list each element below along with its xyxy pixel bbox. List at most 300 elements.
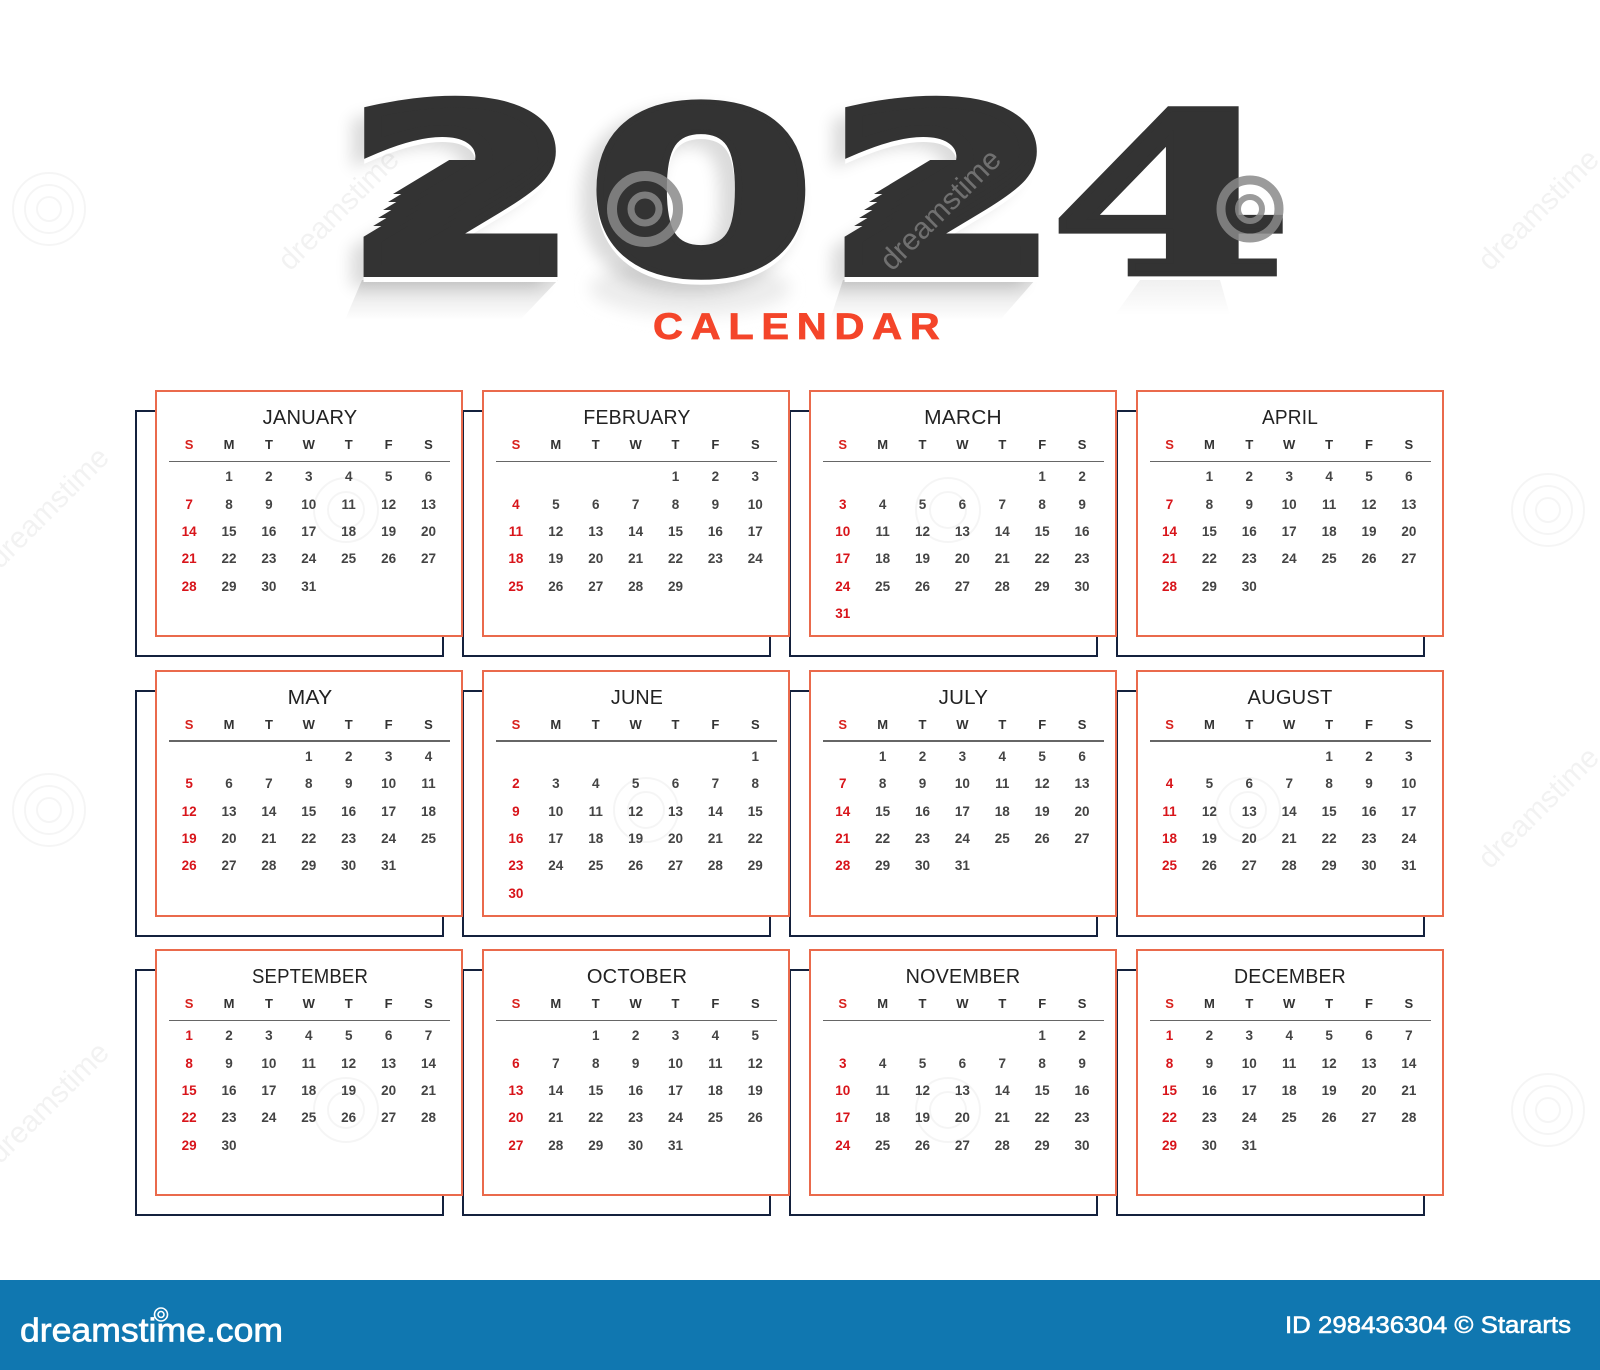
day grid: 5 bbox=[1325, 1028, 1333, 1043]
day grid: 12 bbox=[182, 804, 197, 819]
thickened diagonals of the two digits 2: 2 bbox=[346, 35, 578, 300]
day grid: 16 bbox=[915, 804, 930, 819]
day grid: 10 bbox=[1401, 776, 1416, 791]
day grid: 15 bbox=[588, 1083, 603, 1098]
digits 2024: 0 bbox=[584, 59, 818, 329]
weekday header: S bbox=[1405, 996, 1413, 1011]
day grid: 12 bbox=[341, 1056, 356, 1071]
weekday header: T bbox=[345, 717, 353, 732]
weekday header bbox=[512, 996, 760, 1011]
weekday header: S bbox=[1165, 437, 1174, 452]
weekday header: W bbox=[1283, 437, 1295, 452]
weekday header: W bbox=[629, 437, 642, 452]
weekday header: T bbox=[672, 996, 679, 1011]
day grid: 19 bbox=[628, 831, 643, 846]
panel: March bbox=[789, 390, 1117, 657]
day grid: 8 bbox=[225, 497, 233, 512]
weekday header: W bbox=[956, 437, 969, 452]
day grid: 3 bbox=[305, 469, 313, 484]
day grid: 5 bbox=[752, 1028, 759, 1043]
day grid: 8 bbox=[1206, 497, 1213, 512]
month name: JUNE bbox=[611, 686, 663, 709]
day grid: 30 bbox=[508, 886, 523, 901]
day grid: 7 bbox=[1285, 776, 1293, 791]
day grid: 18 bbox=[1162, 831, 1177, 846]
weekday header: S bbox=[1165, 996, 1174, 1011]
day grid: 7 bbox=[425, 1028, 432, 1043]
day grid: 5 bbox=[385, 469, 392, 484]
day grid: 9 bbox=[1078, 497, 1086, 512]
panel: January bbox=[135, 390, 463, 657]
day grid: 1 bbox=[672, 469, 679, 484]
weekday header: F bbox=[385, 437, 393, 452]
day grid: 3 bbox=[839, 1056, 846, 1071]
month name: MARCH bbox=[925, 406, 1002, 429]
day grid: 24 bbox=[668, 1110, 683, 1125]
day grid: 1 bbox=[225, 469, 233, 484]
weekday header: M bbox=[1204, 996, 1215, 1011]
day grid: 27 bbox=[1075, 831, 1090, 846]
weekday header: S bbox=[838, 996, 847, 1011]
day grid: 3 bbox=[839, 497, 846, 512]
day grid: 4 bbox=[345, 469, 352, 484]
month name: SEPTEMBER bbox=[252, 965, 368, 988]
thickened diagonals of the two digits 2: 2 bbox=[346, 40, 578, 305]
day grid: 28 bbox=[995, 579, 1010, 594]
day grid: 11 bbox=[302, 1056, 316, 1071]
day grid: 5 bbox=[185, 776, 193, 791]
day grid: 4 bbox=[425, 749, 432, 764]
day grid: 19 bbox=[341, 1083, 356, 1098]
day grid: 5 bbox=[552, 497, 560, 512]
day grid: 22 bbox=[875, 831, 890, 846]
day grid: 28 bbox=[421, 1110, 436, 1125]
day grid: 20 bbox=[955, 1110, 970, 1125]
day grid: 15 bbox=[222, 524, 237, 539]
day grid: 11 bbox=[1162, 804, 1177, 819]
day grid: 25 bbox=[588, 858, 603, 873]
day grid: 2 bbox=[632, 1028, 639, 1043]
day grid: 10 bbox=[261, 1056, 276, 1071]
month name: FEBRUARY bbox=[583, 406, 690, 429]
weekday header: S bbox=[424, 717, 433, 732]
weekday header: W bbox=[956, 717, 969, 732]
day grid: 13 bbox=[588, 524, 603, 539]
day grid: 27 bbox=[955, 579, 970, 594]
weekday header: T bbox=[1325, 717, 1333, 732]
weekday header: F bbox=[1365, 717, 1373, 732]
day grid: 2 bbox=[265, 469, 273, 484]
day grid: 28 bbox=[548, 1138, 563, 1153]
day grid: 12 bbox=[628, 804, 643, 819]
day grid: 21 bbox=[995, 551, 1010, 566]
day grid: 14 bbox=[182, 524, 197, 539]
day grid: 30 bbox=[1361, 858, 1376, 873]
day grid: 7 bbox=[1166, 497, 1173, 512]
day grid: 29 bbox=[748, 858, 763, 873]
day grid: 12 bbox=[748, 1056, 763, 1071]
panel: May bbox=[135, 670, 463, 937]
day grid bbox=[1162, 1028, 1416, 1153]
day grid: 19 bbox=[915, 1110, 930, 1125]
day grid: 17 bbox=[261, 1083, 276, 1098]
day grid: 15 bbox=[301, 804, 316, 819]
day grid: 9 bbox=[225, 1056, 233, 1071]
weekday header: M bbox=[877, 996, 888, 1011]
day grid: 4 bbox=[1285, 1028, 1293, 1043]
day grid: 6 bbox=[512, 1056, 520, 1071]
day grid: 5 bbox=[1206, 776, 1213, 791]
weekday header: S bbox=[512, 437, 520, 452]
day grid: 25 bbox=[708, 1110, 723, 1125]
day grid: 12 bbox=[915, 1083, 930, 1098]
day grid: 22 bbox=[1162, 1110, 1177, 1125]
day grid: 10 bbox=[301, 497, 316, 512]
day grid: 17 bbox=[548, 831, 563, 846]
panel: September bbox=[135, 949, 463, 1216]
day grid: 26 bbox=[381, 551, 396, 566]
thickened diagonals of the two digits 2: 2 bbox=[827, 35, 1059, 300]
day grid: 20 bbox=[955, 551, 970, 566]
weekday header: S bbox=[512, 717, 520, 732]
day grid: 8 bbox=[305, 776, 313, 791]
weekday header: M bbox=[550, 996, 561, 1011]
day grid: 1 bbox=[1325, 749, 1333, 764]
zero highlight: 0 bbox=[584, 64, 818, 334]
thickened diagonals of the two digits 2: 2 bbox=[827, 50, 1059, 315]
weekday header: S bbox=[751, 717, 760, 732]
weekday header: T bbox=[265, 996, 273, 1011]
weekday header: T bbox=[345, 437, 353, 452]
weekday header: W bbox=[303, 996, 315, 1011]
day grid: 10 bbox=[1282, 497, 1297, 512]
weekday header: S bbox=[1078, 717, 1086, 732]
day grid: 23 bbox=[1202, 1110, 1217, 1125]
faint watermark text on background bbox=[0, 143, 1600, 1170]
weekday header: S bbox=[185, 996, 193, 1011]
digit shadows: 0 bbox=[572, 69, 806, 339]
day grid: 23 bbox=[222, 1110, 237, 1125]
weekday header bbox=[185, 437, 433, 452]
day grid: 1 bbox=[1206, 469, 1213, 484]
day grid: 16 bbox=[261, 524, 276, 539]
day grid: 8 bbox=[752, 776, 759, 791]
day grid: 15 bbox=[1162, 1083, 1177, 1098]
day grid: 23 bbox=[508, 858, 523, 873]
weekday header bbox=[838, 717, 1086, 732]
day grid: 3 bbox=[552, 776, 560, 791]
weekday header: S bbox=[751, 437, 760, 452]
day grid: 28 bbox=[708, 858, 723, 873]
day grid: 11 bbox=[1322, 497, 1336, 512]
day grid: 2 bbox=[919, 749, 926, 764]
day grid: 20 bbox=[421, 524, 436, 539]
day grid: 1 bbox=[752, 749, 759, 764]
weekday header: T bbox=[592, 996, 600, 1011]
digit shadows bbox=[332, 69, 1045, 339]
weekday header: M bbox=[224, 996, 234, 1011]
day grid: 20 bbox=[1075, 804, 1090, 819]
day grid: 9 bbox=[1365, 776, 1373, 791]
day grid: 1 bbox=[592, 1028, 599, 1043]
day grid: 6 bbox=[385, 1028, 392, 1043]
thickened diagonals of the two digits 2: 2 bbox=[827, 40, 1059, 305]
day grid: 8 bbox=[1038, 1056, 1046, 1071]
weekday header: F bbox=[1365, 996, 1373, 1011]
day grid bbox=[182, 469, 436, 594]
month name: JANUARY bbox=[262, 406, 357, 429]
day grid: 26 bbox=[748, 1110, 763, 1125]
weekday header: T bbox=[1245, 437, 1253, 452]
day grid: 29 bbox=[301, 858, 316, 873]
day grid: 6 bbox=[1246, 776, 1253, 791]
day grid: 23 bbox=[915, 831, 930, 846]
day grid: 9 bbox=[512, 804, 520, 819]
day grid: 27 bbox=[668, 858, 683, 873]
panel: August bbox=[1116, 670, 1444, 937]
weekday header: W bbox=[1283, 996, 1295, 1011]
day grid: 12 bbox=[1322, 1056, 1337, 1071]
day grid: 26 bbox=[628, 858, 643, 873]
day grid: 16 bbox=[1361, 804, 1376, 819]
day grid: 31 bbox=[1242, 1138, 1257, 1153]
weekday header: T bbox=[265, 437, 273, 452]
thickened diagonals of the two digits 2: 2 bbox=[346, 45, 578, 310]
day grid: 3 bbox=[1285, 469, 1293, 484]
day grid: 30 bbox=[1202, 1138, 1217, 1153]
weekday header bbox=[512, 437, 760, 452]
weekday header: W bbox=[956, 996, 969, 1011]
day grid: 20 bbox=[1401, 524, 1416, 539]
day grid: 18 bbox=[508, 551, 523, 566]
weekday header: W bbox=[629, 717, 642, 732]
day grid: 4 bbox=[1166, 776, 1173, 791]
day grid: 6 bbox=[425, 469, 432, 484]
thickened diagonals of the two digits 2: 2 bbox=[827, 55, 1059, 320]
day grid: 11 bbox=[421, 776, 436, 791]
day grid: 25 bbox=[301, 1110, 316, 1125]
day grid: 14 bbox=[261, 804, 276, 819]
calendar subtitle: CALENDAR bbox=[653, 306, 940, 347]
day grid: 29 bbox=[1035, 1138, 1050, 1153]
day grid: 18 bbox=[1282, 1083, 1297, 1098]
day grid: 24 bbox=[381, 831, 396, 846]
day grid bbox=[835, 749, 1090, 873]
day grid: 17 bbox=[1242, 1083, 1257, 1098]
day grid: 6 bbox=[1078, 749, 1086, 764]
weekday header: W bbox=[303, 437, 315, 452]
thickened diagonals of the two digits 2: 2 bbox=[346, 55, 578, 320]
day grid: 9 bbox=[1206, 1056, 1213, 1071]
day grid: 2 bbox=[512, 776, 520, 791]
day grid: 26 bbox=[548, 579, 563, 594]
day grid: 4 bbox=[592, 776, 599, 791]
day grid: 21 bbox=[1282, 831, 1297, 846]
day grid: 7 bbox=[1405, 1028, 1413, 1043]
day grid: 8 bbox=[592, 1056, 599, 1071]
weekday header bbox=[185, 717, 433, 732]
day grid bbox=[508, 1028, 763, 1153]
day grid: 21 bbox=[421, 1083, 436, 1098]
thickened diagonals of the two digits 2 bbox=[373, 160, 956, 226]
day grid: 13 bbox=[421, 497, 436, 512]
weekday header: S bbox=[1405, 717, 1413, 732]
digit highlights: 2 bbox=[827, 65, 1059, 330]
day grid: 19 bbox=[1322, 1083, 1337, 1098]
day grid: 24 bbox=[301, 551, 316, 566]
weekday header: S bbox=[838, 437, 847, 452]
day grid: 13 bbox=[508, 1083, 523, 1098]
day grid: 9 bbox=[265, 497, 273, 512]
day grid: 14 bbox=[1401, 1056, 1416, 1071]
day grid: 24 bbox=[1242, 1110, 1257, 1125]
month name: OCTOBER bbox=[586, 965, 687, 988]
day grid: 2 bbox=[225, 1028, 233, 1043]
day grid: 14 bbox=[421, 1056, 436, 1071]
weekday header: S bbox=[838, 717, 847, 732]
day grid bbox=[182, 1028, 436, 1153]
day grid: 23 bbox=[1075, 551, 1090, 566]
day grid: 13 bbox=[1242, 804, 1257, 819]
day grid: 24 bbox=[1282, 551, 1297, 566]
day grid: 31 bbox=[668, 1138, 683, 1153]
day grid: 3 bbox=[959, 749, 966, 764]
day grid: 27 bbox=[421, 551, 436, 566]
day grid: 20 bbox=[588, 551, 603, 566]
digit shadows: 2 bbox=[813, 71, 1045, 336]
day grid: 14 bbox=[1162, 524, 1177, 539]
day grid: 18 bbox=[875, 1110, 890, 1125]
day grid: 27 bbox=[381, 1110, 396, 1125]
day grid: 6 bbox=[1365, 1028, 1373, 1043]
day grid: 28 bbox=[182, 579, 197, 594]
day grid bbox=[1162, 749, 1416, 873]
day grid: 25 bbox=[508, 579, 523, 594]
day grid: 27 bbox=[588, 579, 603, 594]
day grid: 20 bbox=[1242, 831, 1257, 846]
day grid bbox=[835, 1028, 1090, 1153]
weekday header bbox=[1165, 996, 1413, 1011]
title: 2024 calendar heading bbox=[332, 59, 1293, 347]
day grid: 26 bbox=[1361, 551, 1376, 566]
day grid: 27 bbox=[222, 858, 237, 873]
day grid: 1 bbox=[879, 749, 886, 764]
day grid: 31 bbox=[955, 858, 970, 873]
weekday header: T bbox=[592, 717, 600, 732]
day grid: 30 bbox=[1075, 1138, 1090, 1153]
weekday header: T bbox=[1245, 717, 1253, 732]
day grid: 15 bbox=[1035, 524, 1050, 539]
day grid: 21 bbox=[628, 551, 643, 566]
day grid: 14 bbox=[835, 804, 850, 819]
day grid: 5 bbox=[632, 776, 639, 791]
day grid: 20 bbox=[668, 831, 683, 846]
day grid: 29 bbox=[1162, 1138, 1177, 1153]
day grid: 19 bbox=[381, 524, 396, 539]
weekday header: S bbox=[1078, 437, 1086, 452]
day grid: 15 bbox=[1202, 524, 1217, 539]
month name: MAY bbox=[287, 686, 332, 709]
day grid: 1 bbox=[1038, 469, 1046, 484]
day grid: 11 bbox=[708, 1056, 723, 1071]
weekday header: W bbox=[1283, 717, 1295, 732]
day grid: 14 bbox=[995, 524, 1010, 539]
day grid: 11 bbox=[509, 524, 523, 539]
day grid: 11 bbox=[995, 776, 1009, 791]
day grid: 25 bbox=[1282, 1110, 1297, 1125]
day grid: 26 bbox=[1202, 858, 1217, 873]
day grid: 16 bbox=[341, 804, 356, 819]
day grid: 7 bbox=[632, 497, 639, 512]
day grid: 14 bbox=[1282, 804, 1297, 819]
day grid: 16 bbox=[708, 524, 723, 539]
day grid: 12 bbox=[548, 524, 563, 539]
day grid: 6 bbox=[959, 1056, 966, 1071]
weekday header: S bbox=[512, 996, 520, 1011]
day grid: 29 bbox=[875, 858, 890, 873]
faint watermark spirals on background bbox=[13, 173, 1584, 1146]
image id and credit: ID 298436304 © Stararts bbox=[1285, 1312, 1571, 1339]
digits 2024: 2 bbox=[346, 60, 578, 325]
day grid: 15 bbox=[748, 804, 763, 819]
day grid: 22 bbox=[1202, 551, 1217, 566]
day grid: 18 bbox=[708, 1083, 723, 1098]
day grid: 19 bbox=[748, 1083, 763, 1098]
panel: June bbox=[462, 670, 790, 937]
day grid: 23 bbox=[1242, 551, 1257, 566]
day grid: 18 bbox=[995, 804, 1010, 819]
day grid: 10 bbox=[835, 524, 850, 539]
day grid: 22 bbox=[222, 551, 237, 566]
day grid: 13 bbox=[1361, 1056, 1376, 1071]
weekday header: M bbox=[224, 437, 234, 452]
weekday header: M bbox=[1204, 437, 1215, 452]
day grid: 15 bbox=[875, 804, 890, 819]
day grid: 24 bbox=[835, 1138, 850, 1153]
day grid: 13 bbox=[1075, 776, 1090, 791]
weekday header: T bbox=[919, 996, 926, 1011]
day grid: 28 bbox=[628, 579, 643, 594]
panel: October bbox=[462, 949, 790, 1216]
weekday header: S bbox=[1165, 717, 1174, 732]
day grid: 4 bbox=[305, 1028, 313, 1043]
day grid: 2 bbox=[712, 469, 719, 484]
day grid: 24 bbox=[835, 579, 850, 594]
day grid: 8 bbox=[1325, 776, 1333, 791]
day grid: 3 bbox=[1246, 1028, 1253, 1043]
weekday header: T bbox=[265, 717, 273, 732]
weekday header: F bbox=[711, 717, 719, 732]
day grid: 4 bbox=[879, 1056, 886, 1071]
day grid: 12 bbox=[381, 497, 396, 512]
month name: APRIL bbox=[1262, 406, 1318, 429]
day grid: 12 bbox=[1202, 804, 1217, 819]
weekday header: S bbox=[185, 717, 193, 732]
day grid: 12 bbox=[1035, 776, 1050, 791]
day grid: 8 bbox=[185, 1056, 193, 1071]
day grid: 30 bbox=[1242, 579, 1257, 594]
day grid: 28 bbox=[1401, 1110, 1416, 1125]
day grid: 29 bbox=[588, 1138, 603, 1153]
day grid: 2 bbox=[1365, 749, 1373, 764]
day grid: 18 bbox=[1322, 524, 1337, 539]
day grid: 15 bbox=[182, 1083, 197, 1098]
panel: July bbox=[789, 670, 1117, 937]
day grid: 11 bbox=[589, 804, 603, 819]
day grid: 28 bbox=[261, 858, 276, 873]
day grid: 31 bbox=[301, 579, 316, 594]
day grid bbox=[182, 749, 436, 873]
